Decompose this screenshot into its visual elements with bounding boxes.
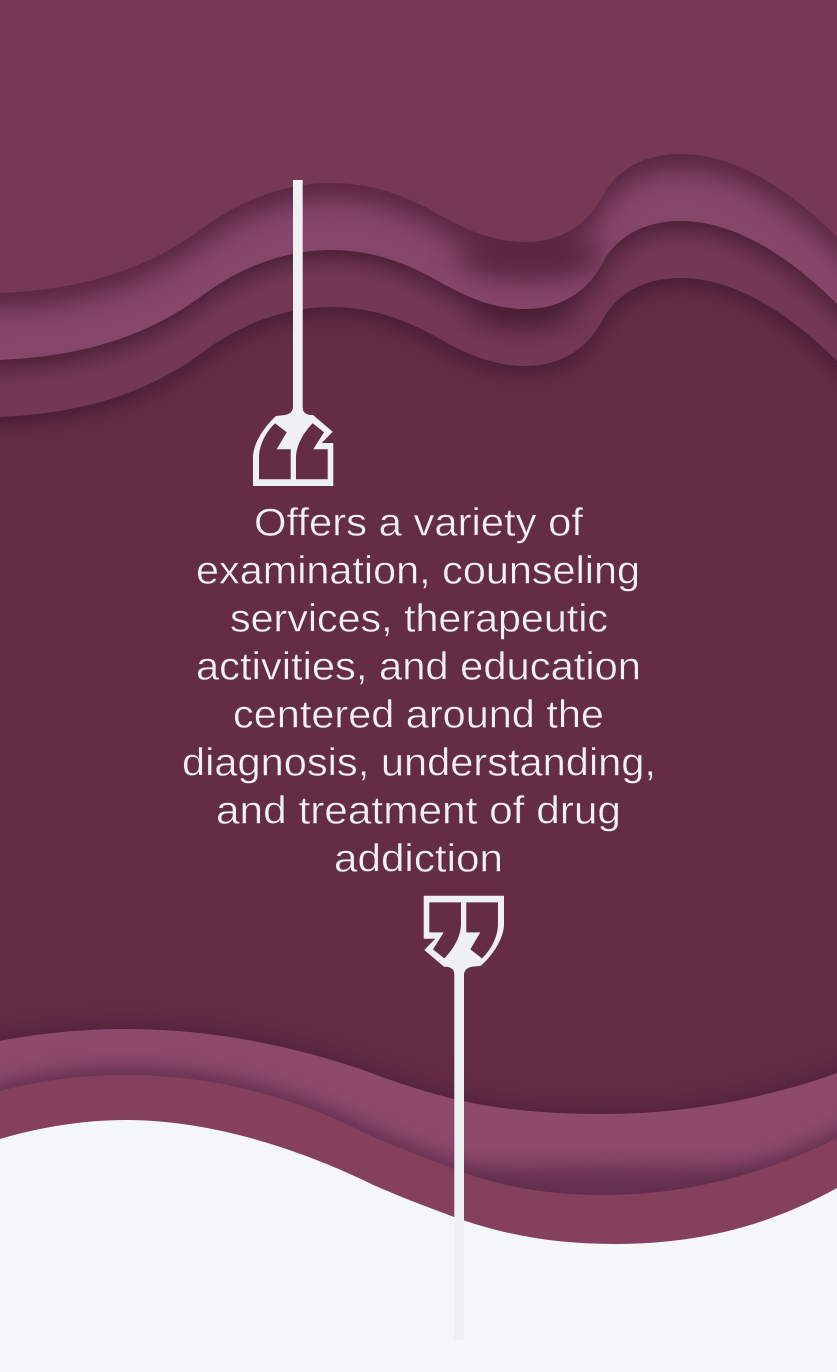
body text: examination, counseling — [196, 550, 640, 593]
icon: opening quotation mark with stem — [253, 180, 333, 486]
top wave layer: outer — [0, 0, 837, 297]
body text: addiction — [334, 838, 503, 881]
body text: centered around the — [233, 694, 604, 737]
top wave layer: inner — [0, 0, 837, 421]
bottom wave layer: light band — [0, 1029, 837, 1372]
body text: Offers a variety of — [254, 502, 583, 545]
body text: services, therapeutic — [230, 598, 608, 641]
body text: diagnosis, understanding, — [182, 742, 656, 785]
body text: activities, and education — [196, 646, 641, 689]
body text — [182, 502, 656, 881]
body text: and treatment of drug — [216, 790, 621, 833]
icon: closing quotation mark with stem — [424, 896, 504, 1340]
top wave layer: light band — [0, 0, 837, 364]
bottom white area — [0, 1120, 837, 1372]
bottom wave layer: middle — [0, 1075, 837, 1372]
